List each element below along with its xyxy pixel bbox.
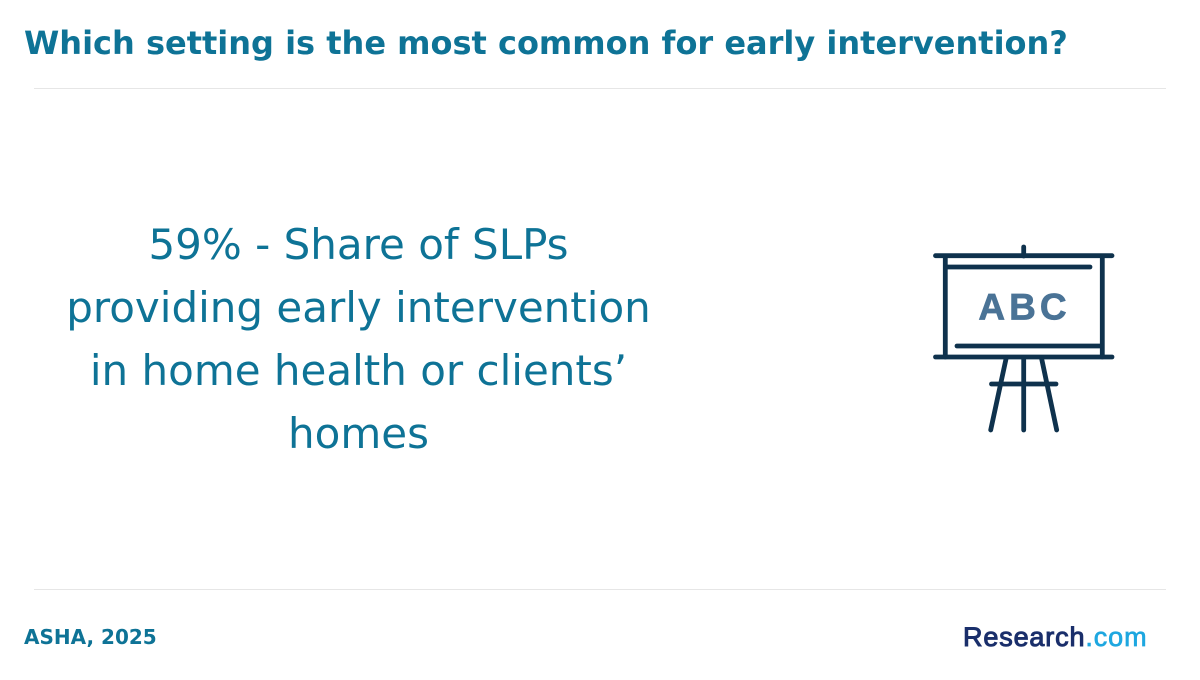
main statistic text: 59% - Share of SLPs (148, 220, 569, 269)
main statistic text (66, 220, 651, 458)
title: Which setting is the most common for early intervention? (24, 24, 1068, 62)
logo: Research.com: Research.com (963, 622, 1147, 652)
source label: ASHA, 2025 (24, 625, 157, 649)
icon: easel presentation board with ABC: ABC (978, 286, 1071, 328)
main statistic text: in home health or clients’ (90, 346, 627, 395)
main statistic text: homes (288, 409, 429, 458)
main statistic text: providing early intervention (66, 283, 651, 332)
icon: easel presentation board with ABC (933, 244, 1114, 432)
